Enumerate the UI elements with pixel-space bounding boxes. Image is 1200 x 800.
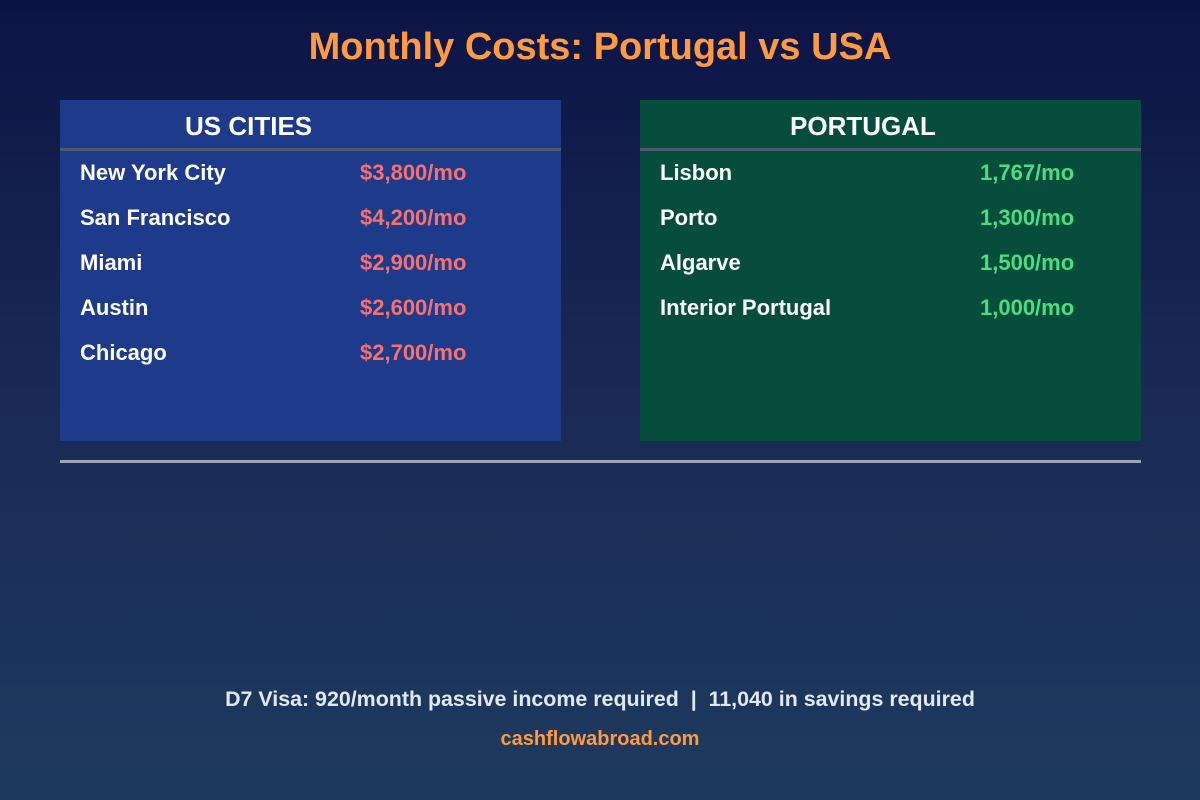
list: US city costs [80, 160, 466, 365]
heading: Portugal [640, 100, 1141, 151]
list: US city costs: $2,900/mo [360, 250, 466, 275]
list: Portugal costs: 1,300/mo [980, 205, 1074, 230]
list: US city costs: Chicago [80, 340, 167, 365]
list: US city costs: New York City [80, 160, 226, 185]
heading: US cities [60, 100, 561, 151]
list: Portugal costs: 1,000/mo [980, 295, 1074, 320]
heading: Portugal: PORTUGAL [790, 111, 936, 141]
list: Portugal costs: Interior Portugal [660, 295, 831, 320]
list: Portugal costs [660, 160, 1074, 320]
heading: US cities: US CITIES [185, 111, 312, 141]
footer: website: cashflowabroad.com [501, 728, 699, 750]
list: US city costs: $2,700/mo [360, 340, 466, 365]
list: Portugal costs: 1,500/mo [980, 250, 1074, 275]
list: Portugal costs: 1,767/mo [980, 160, 1074, 185]
panel: US cities [60, 100, 561, 441]
list: Portugal costs: Porto [660, 205, 717, 230]
list: Portugal costs: Algarve [660, 250, 741, 275]
list: US city costs: $4,200/mo [360, 205, 466, 230]
list: US city costs: $3,800/mo [360, 160, 466, 185]
list: US city costs: Austin [80, 295, 148, 320]
panel: Portugal [640, 100, 1141, 441]
list: US city costs: Miami [80, 250, 142, 275]
footer note: D7 visa: D7 Visa: 920/month passive income required | 11,040 in savings required [225, 687, 975, 711]
list: US city costs: San Francisco [80, 205, 230, 230]
title: Monthly Costs: Portugal vs USA [309, 26, 891, 68]
list: US city costs: $2,600/mo [360, 295, 466, 320]
list: Portugal costs: Lisbon [660, 160, 732, 185]
